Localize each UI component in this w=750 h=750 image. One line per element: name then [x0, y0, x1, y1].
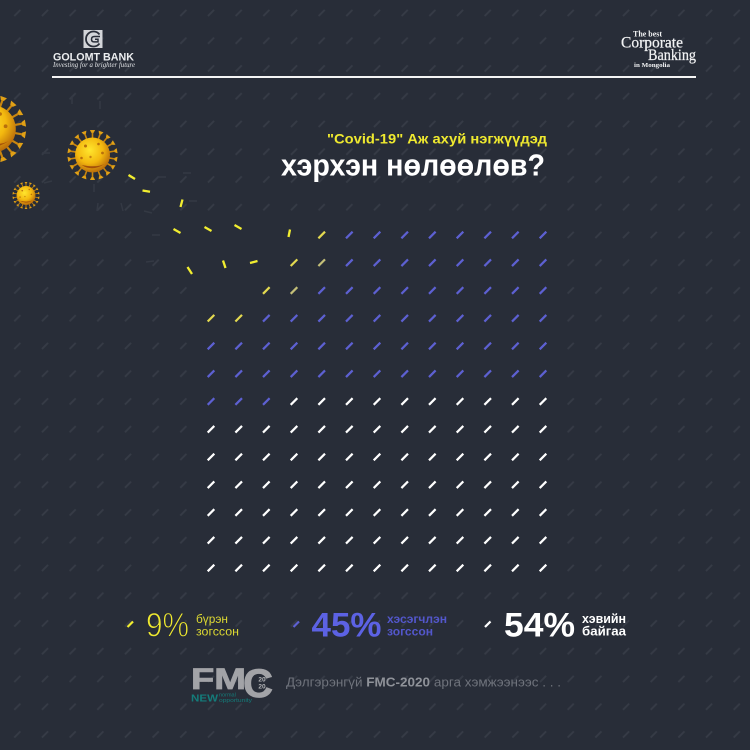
header rule — [52, 76, 696, 78]
bank name: GOLOMT BANK — [53, 52, 134, 64]
2020 mark: 20 — [258, 676, 266, 684]
label: зогссон — [196, 625, 239, 639]
award logo: The best Corporate Banking: Banking — [648, 47, 696, 64]
logo: FMC 2020 — [191, 662, 273, 706]
FMC letters: FM — [191, 663, 246, 696]
icon: bank emblem — [84, 30, 102, 48]
2020 mark: 20 — [258, 684, 266, 690]
footer note: Дэлгэрэнгүй FMC-2020 арга хэмжээнээс . . . — [286, 674, 561, 690]
FMC letters: C — [243, 662, 273, 706]
value 45%: 45% — [312, 606, 382, 644]
subtitle: "Covid-19" Аж ахуй нэгжүүдэд — [327, 130, 547, 146]
legend: 45% partly stopped — [294, 606, 447, 644]
label: хэсэгчлэн — [387, 612, 447, 626]
label: зогссон — [387, 625, 433, 639]
award logo: The best Corporate Banking: in Mongolia — [634, 62, 671, 69]
legend dash blue — [294, 622, 299, 627]
fading yellow dashes — [208, 232, 325, 322]
legend: 9% fully stopped — [128, 606, 239, 644]
legend: 54% operating normally — [485, 606, 627, 644]
normal opportunity: normal — [219, 692, 236, 698]
legend dash white — [485, 622, 490, 627]
icon: small virus — [12, 182, 40, 209]
award logo: The best Corporate Banking: The best — [633, 30, 662, 38]
label: хэвийн — [582, 612, 626, 626]
legend dash yellow — [128, 622, 133, 627]
dot matrix chart — [128, 175, 546, 571]
scattered yellow dashes — [128, 175, 290, 274]
title: хэрхэн нөлөөлөв? — [281, 148, 545, 182]
normal opportunity: opportunity — [219, 698, 252, 704]
blue dashes — [207, 230, 547, 406]
logo: Golomt Bank — [52, 30, 135, 69]
label: байгаа — [582, 624, 627, 638]
icon: large virus cropped at left edge — [0, 95, 26, 163]
award logo: The best Corporate Banking — [621, 30, 696, 69]
bank tagline: Investing for a brighter future — [52, 61, 135, 69]
NEW: NEW — [191, 694, 219, 704]
award logo: The best Corporate Banking: Corporate — [621, 34, 683, 52]
value 54%: 54% — [504, 606, 575, 644]
label: бүрэн — [196, 612, 228, 626]
white dashes — [207, 397, 547, 572]
value 9%: 9% — [146, 606, 189, 644]
icon: medium virus — [67, 130, 118, 180]
